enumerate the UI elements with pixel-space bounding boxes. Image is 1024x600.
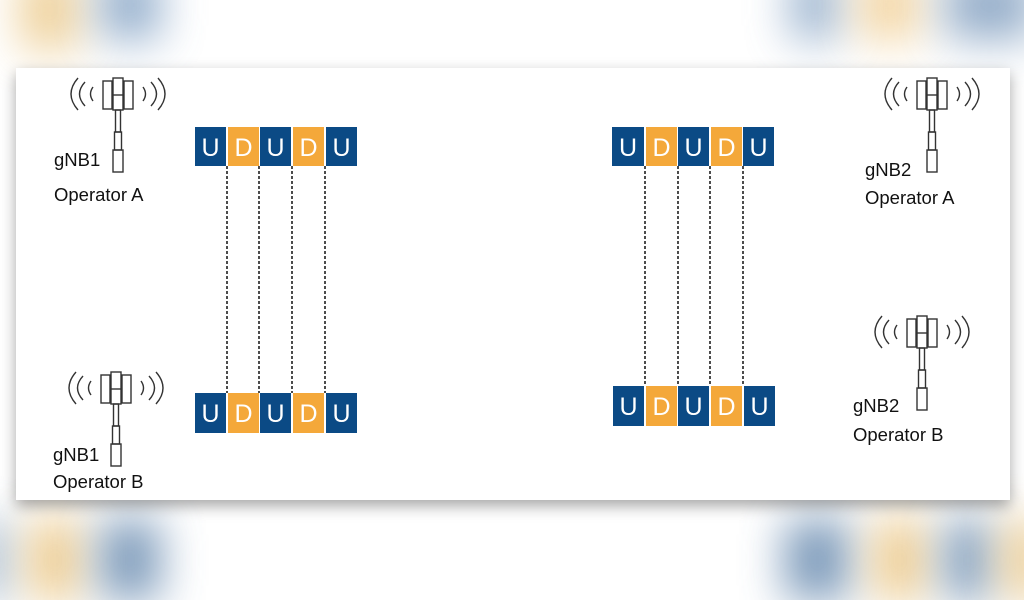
slot row: right top: U [749,134,768,162]
tower: gNB1 Operator A: Operator A [54,184,144,205]
slot row: right bottom: U [619,393,638,421]
slot row: left top: U [201,134,220,162]
slot row: left top: U [332,134,351,162]
slot row: right top [612,127,774,166]
tower: gNB2 Operator B: Operator B [853,424,944,445]
slot row: left top: U [266,134,285,162]
slot row: right top: D [652,134,671,162]
slot row: right bottom: U [684,393,703,421]
slot row: left top: D [234,134,253,162]
tower: gNB2 Operator A: gNB2 [865,159,911,180]
slot row: left bottom: U [266,400,285,428]
slot row: left bottom [195,393,357,433]
tower: gNB2 Operator A: Operator A [865,187,955,208]
slot row: right bottom [613,386,775,426]
slot row: right top: D [717,134,736,162]
panel: main diagram [16,68,1010,500]
slot row: left top: D [299,134,318,162]
dashed alignment lines [227,166,743,393]
slot row: left bottom: U [201,400,220,428]
slot row: right top: U [684,134,703,162]
tower: gNB2 Operator B: gNB2 [853,395,899,416]
tower: gNB1 Operator A [54,78,165,205]
slot row: right bottom: U [750,393,769,421]
slot row: right bottom: D [717,393,736,421]
slot row: left bottom: U [332,400,351,428]
slot row: left bottom: D [234,400,253,428]
tower: gNB2 Operator B [853,316,969,445]
slot row: right bottom: D [652,393,671,421]
tower: gNB2 Operator A [865,78,979,208]
slot row: left top [195,127,357,166]
slot row: right top: U [619,134,637,162]
tower: gNB1 Operator B: Operator B [53,471,144,492]
tower: gNB1 Operator A: gNB1 [54,149,100,170]
tower: gNB1 Operator B [53,372,163,492]
tower: gNB1 Operator B: gNB1 [53,444,99,465]
slot row: left bottom: D [299,400,318,428]
